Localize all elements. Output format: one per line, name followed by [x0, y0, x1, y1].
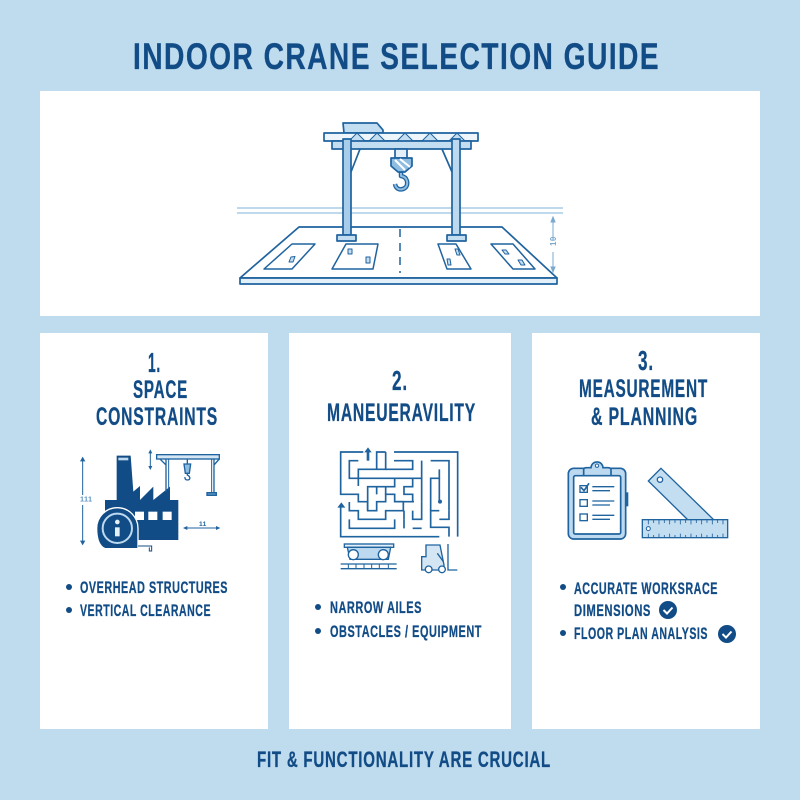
icon: check badge: [718, 625, 736, 643]
icon: factory, tape measure and crane: 111: [80, 494, 93, 503]
heading: measurement and planning: & PLANNING: [591, 403, 698, 431]
icon: factory: [105, 456, 178, 540]
icon: ruler: [642, 468, 728, 538]
heading: space constraints: 1.: [148, 347, 161, 378]
icon: rail cart: [341, 544, 397, 569]
bullet list: [315, 598, 482, 641]
bullet list: VERTICAL CLEARANCE: [80, 601, 211, 620]
heading: maneuverability: MANEUERAVILITY: [327, 399, 476, 427]
panel: space constraints: [40, 333, 268, 729]
icon: check badge: [659, 601, 677, 619]
icon: clipboard: [568, 462, 628, 539]
heading: measurement and planning: 3.: [638, 345, 654, 376]
panel: hero crane illustration: [40, 91, 760, 316]
heading: maneuverability: 2.: [392, 365, 408, 396]
bullet list: NARROW AILES: [330, 598, 422, 617]
heading: maneuverability: [327, 365, 476, 427]
footer tagline: FIT & FUNCTIONALITY ARE CRUCIAL: [257, 747, 551, 772]
heading: measurement and planning: MEASUREMENT: [579, 375, 708, 403]
heading: space constraints: SPACE: [133, 376, 188, 404]
floor plan: [240, 227, 557, 284]
bullet list: OVERHEAD STRUCTURES: [80, 578, 228, 597]
bullet list: [66, 578, 228, 620]
panel: maneuverability: [289, 333, 511, 729]
icon: clipboard and ruler: [568, 462, 728, 539]
icon: gantry crane: [324, 123, 478, 241]
dimension arrow: [549, 217, 558, 272]
heading: space constraints: [96, 347, 218, 431]
icon: factory, tape measure and crane: [80, 449, 220, 551]
bullet list: [560, 579, 736, 643]
heading: space constraints: CONSTRAINTS: [96, 403, 218, 431]
icon: maze, rail cart and forklift: [337, 447, 458, 573]
bullet list: ACCURATE WORKSRACE: [574, 579, 718, 598]
icon: maze: [341, 452, 458, 537]
icon: factory, tape measure and crane: 11: [199, 521, 207, 528]
dimension arrow: 10: [549, 236, 558, 246]
bullet list: OBSTACLES / EQUIPMENT: [330, 622, 482, 641]
panel: measurement and planning: [532, 333, 760, 729]
bullet list: DIMENSIONS: [574, 601, 651, 620]
icon: back wall lines: [237, 208, 563, 213]
bullet list: FLOOR PLAN ANALYSIS: [574, 624, 708, 643]
icon: forklift: [422, 544, 457, 573]
dimension arrows: [80, 449, 220, 545]
icon: small crane: [157, 455, 219, 495]
icon: tape measure: [97, 508, 152, 551]
heading: measurement and planning: [579, 345, 708, 431]
